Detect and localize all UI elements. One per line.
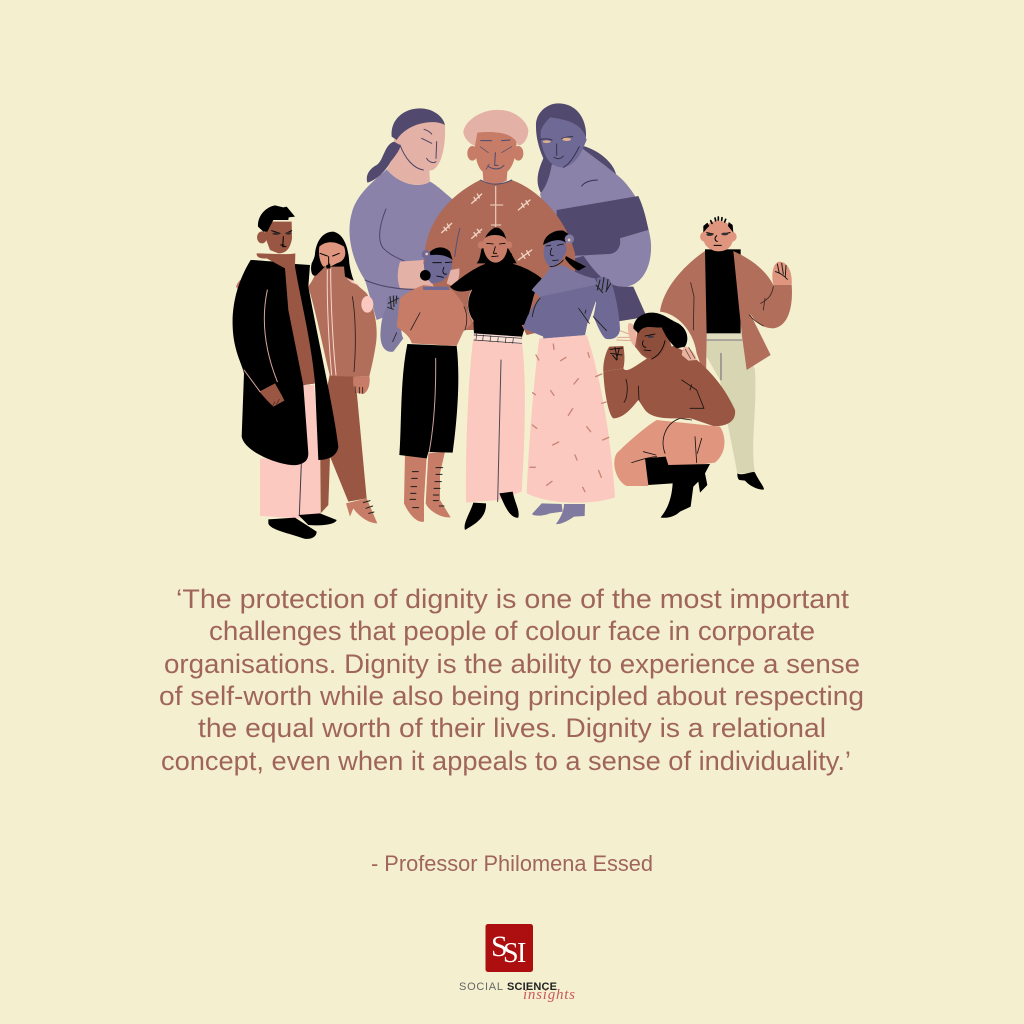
quote text: of self-worth while also being principled about respecting bbox=[159, 681, 864, 711]
logo: Social Science Insights bbox=[459, 924, 575, 1003]
figure: man on the right in brown jacket bbox=[660, 217, 792, 490]
logo badge: I bbox=[517, 938, 526, 969]
figure: crouching woman with raised fist bbox=[603, 313, 735, 518]
figure: back-right woman in dark purple bbox=[536, 103, 651, 322]
quote text: challenges that people of colour face in corporate bbox=[209, 616, 815, 646]
pattern: skirt speckles bbox=[530, 344, 609, 492]
quote text: concept, even when it appeals to a sense of individuality.’ bbox=[161, 746, 851, 776]
logo badge: S bbox=[503, 938, 519, 969]
quote text bbox=[159, 584, 864, 776]
figure: back-left woman in grey-purple bbox=[349, 108, 458, 320]
logo wordmark: SCIENCE bbox=[507, 981, 557, 993]
logo wordmark: SOCIAL bbox=[459, 981, 503, 993]
figure: girl with speckled pink skirt bbox=[523, 231, 620, 524]
quote text: ‘The protection of dignity is one of the most important bbox=[176, 584, 850, 614]
quote text: the equal worth of their lives. Dignity is a relational bbox=[198, 713, 826, 743]
illustration: group of diverse people bbox=[233, 103, 792, 539]
quote attribution: - Professor Philomena Essed bbox=[371, 851, 653, 876]
figure: woman in brown zip jacket bbox=[308, 232, 377, 523]
logo wordmark bbox=[459, 981, 575, 1003]
pattern: leaf sprigs bbox=[442, 194, 532, 260]
quote text: organisations. Dignity is the ability to experience a sense bbox=[164, 649, 860, 679]
figure: centre girl in black turtleneck and pink trousers bbox=[450, 227, 542, 530]
figure: elder in centre with leaf-patterned jacket bbox=[423, 110, 575, 330]
logo wordmark: insights bbox=[523, 987, 575, 1003]
logo badge: S bbox=[491, 930, 508, 963]
figure: man on the left in black coat bbox=[233, 205, 338, 539]
figure: girl with black culottes and purple face bbox=[380, 247, 472, 522]
logo badge bbox=[486, 924, 533, 972]
